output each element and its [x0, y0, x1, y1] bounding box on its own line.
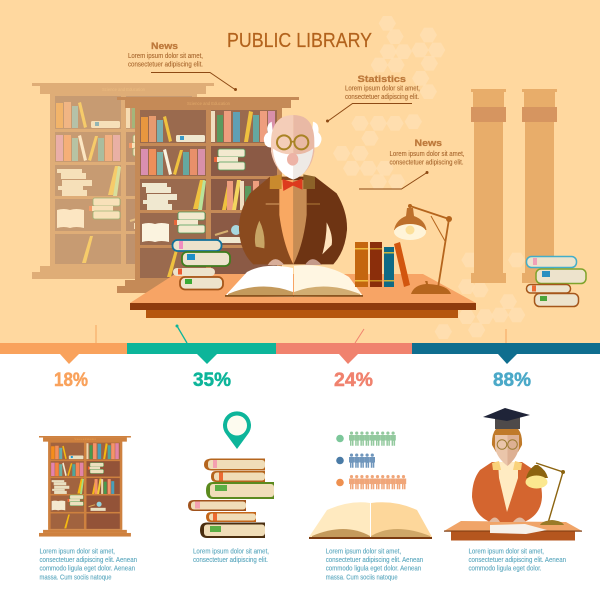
text: column 3: consectetuer adipiscing elit. Aenean	[326, 555, 423, 564]
text: column 2: consectetuer adipiscing elit.	[193, 555, 268, 564]
title: PUBLIC LIBRARY	[227, 30, 372, 52]
book stack right	[526, 256, 586, 306]
columns	[471, 89, 557, 283]
callout: statistics: Statistics	[358, 74, 406, 85]
bow tie	[282, 178, 302, 191]
background	[0, 0, 600, 343]
callout: statistics: Lorem ipsum dolor sit amet,	[345, 84, 420, 92]
text: column 1: massa. Cum sociis natoque	[40, 572, 112, 582]
desk	[130, 274, 476, 318]
text: column 2: Lorem ipsum dolor sit amet,	[193, 546, 269, 556]
books on desk	[355, 242, 410, 287]
progress bar	[0, 343, 600, 364]
pictogram: people rows	[336, 432, 406, 489]
hands and papers	[489, 518, 526, 522]
callout: news right: News	[414, 138, 442, 149]
callout: news left: News	[151, 41, 178, 52]
small lamp	[536, 463, 563, 523]
head	[264, 115, 322, 180]
text: column 4	[468, 546, 566, 572]
honeycomb pattern	[333, 16, 525, 339]
jacket	[239, 174, 347, 265]
percent 18: 18%	[54, 369, 88, 391]
book stack on desk	[172, 240, 230, 290]
icon: graduate at desk	[444, 408, 582, 540]
head	[492, 424, 522, 452]
icon: map pin	[223, 411, 251, 449]
callout: news right: consectetuer adipiscing elit.	[390, 158, 464, 166]
text: column 4: commodo ligula eget dolor.	[468, 564, 542, 572]
graduation cap	[495, 417, 520, 429]
desk lamp	[394, 204, 452, 294]
text: column 4: Lorem ipsum dolor sit amet,	[468, 546, 544, 556]
text: column 3: massa. Cum sociis natoque	[326, 572, 398, 582]
text: column 1: commodo ligula eget dolor. Aenean	[40, 564, 135, 572]
callout: news right: Lorem ipsum dolor sit amet,	[390, 149, 464, 158]
icon: large open book	[309, 502, 432, 539]
text: column 1: Lorem ipsum dolor sit amet,	[40, 546, 115, 556]
callout: statistics	[326, 74, 420, 122]
callout: news left	[128, 41, 237, 91]
percent 88: 88%	[493, 369, 531, 391]
section pins	[96, 324, 506, 343]
desk surface	[444, 521, 582, 531]
callout: statistics: consectetuer adipiscing elit.	[345, 92, 419, 101]
percent 24: 24%	[334, 369, 373, 391]
text: column 3	[326, 546, 423, 582]
icon: bookcase	[39, 436, 131, 537]
text: column 3: Lorem ipsum dolor sit amet,	[326, 546, 401, 556]
bookcase: front	[117, 97, 299, 293]
callout: news right	[359, 138, 464, 189]
text: column 3: commodo ligula eget dolor. Aenean	[326, 564, 421, 572]
open book	[225, 265, 363, 297]
percent 35: 35%	[193, 369, 231, 391]
callout: news left: Lorem ipsum dolor sit amet,	[128, 51, 203, 60]
jacket	[472, 462, 542, 522]
bookcase: faded back	[32, 83, 214, 279]
icon: book stack	[188, 458, 274, 538]
professor	[239, 115, 347, 265]
text: column 1	[40, 546, 137, 582]
text: column 1: consectetuer adipiscing elit. Aenean	[40, 555, 137, 564]
text: column 2	[193, 546, 269, 564]
text: column 4: consectetuer adipiscing elit. Aenean	[468, 555, 566, 564]
callout: news left: consectetuer adipiscing elit.	[128, 60, 203, 68]
